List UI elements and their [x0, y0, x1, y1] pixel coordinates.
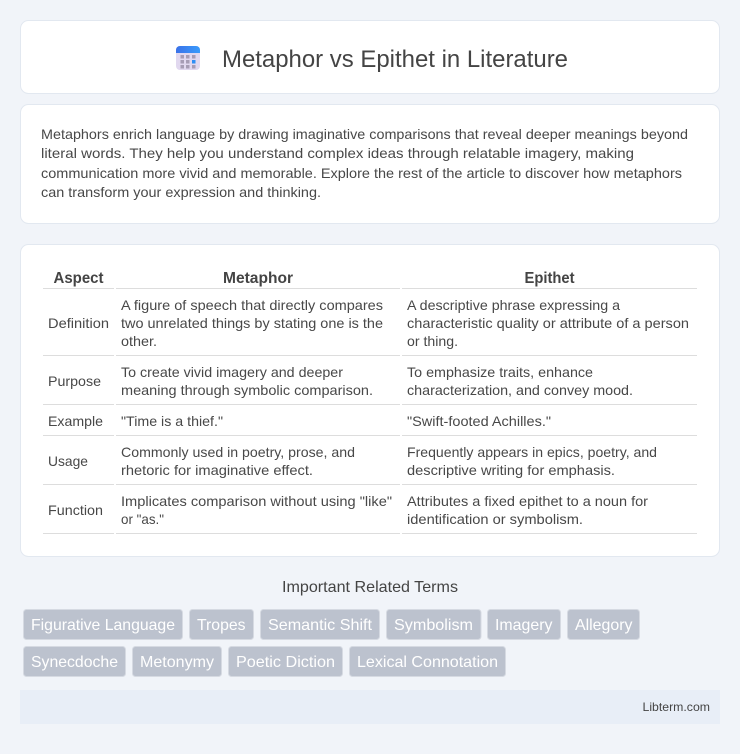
table header row: Aspect [54, 270, 104, 287]
table row: function: or "as." [121, 511, 164, 527]
table header row [54, 270, 575, 287]
table row: usage: descriptive writing for emphasis. [407, 462, 615, 478]
table row: example: "Swift-footed Achilles." [407, 413, 551, 429]
table row: purpose: Purpose [48, 373, 101, 389]
table row: usage: Usage [48, 453, 88, 469]
table row: example: Example [48, 413, 103, 429]
table row: definition: Definition [48, 315, 109, 331]
panel: title card [20, 20, 720, 94]
table row: definition: A figure of speech that directly compares [121, 297, 383, 313]
table row: definition: two unrelated things by stating one is the [121, 315, 383, 331]
related term chips: Synecdoche [31, 654, 118, 671]
table row: usage: rhetoric for imaginative effect. [121, 462, 313, 478]
related term chips: Imagery [495, 617, 552, 634]
heading: related terms: Important Related Terms [282, 579, 458, 596]
text block: introduction: Metaphors enrich language by drawing imaginative comparisons that reveal deeper meanings beyond [41, 126, 688, 142]
table row: definition [48, 297, 689, 349]
table row: example [48, 413, 551, 429]
table row: purpose: characterization, and convey mood. [407, 382, 633, 398]
related term chips: Symbolism [394, 617, 473, 634]
related term chips: Lexical Connotation [357, 654, 498, 671]
table row: usage [48, 444, 657, 478]
panel: introduction [20, 104, 720, 224]
related term chips: Metonymy [140, 654, 214, 671]
related term chips: Poetic Diction [236, 654, 335, 671]
related term chips: Tropes [197, 617, 246, 634]
panel: comparison table [20, 244, 720, 556]
table header row: Metaphor [223, 270, 293, 287]
table row: function: Attributes a fixed epithet to a noun for [407, 493, 648, 509]
related term chips: Allegory [575, 617, 632, 634]
table row: usage: Commonly used in poetry, prose, and [121, 444, 355, 460]
footer [20, 690, 720, 724]
table row: definition: or thing. [407, 333, 458, 349]
table row: function: Implicates comparison without using "like" [121, 493, 392, 509]
text block: introduction: literal words. They help you understand complex ideas through relatable imagery, making [41, 145, 634, 161]
table row: definition: other. [121, 333, 157, 349]
table row: function [48, 493, 648, 527]
table header row: Epithet [524, 270, 575, 287]
table row: definition: A descriptive phrase expressing a [407, 297, 620, 313]
table row: purpose: To emphasize traits, enhance [407, 364, 593, 380]
related term chips: Semantic Shift [268, 617, 373, 634]
table row: function: identification or symbolism. [407, 511, 583, 527]
related term chips [24, 610, 640, 676]
table row: purpose [48, 364, 633, 398]
footer: Libterm.com [642, 700, 710, 714]
table row: purpose: To create vivid imagery and deeper [121, 364, 343, 380]
table row: usage: Frequently appears in epics, poetry, and [407, 444, 657, 460]
table row: example: "Time is a thief." [121, 413, 223, 429]
table row: function: Function [48, 502, 103, 518]
title: Metaphor vs Epithet in Literature [222, 46, 568, 73]
icon: calendar [176, 46, 200, 70]
table row: definition: characteristic quality or attribute of a person [407, 315, 689, 331]
related term chips: Figurative Language [31, 617, 175, 634]
text block: introduction: communication more vivid and memorable. Explore the rest of the article to discover how metaphors [41, 165, 682, 181]
table row: purpose: meaning through symbolic comparison. [121, 382, 373, 398]
text block: introduction: can transform your expression and thinking. [41, 184, 321, 200]
